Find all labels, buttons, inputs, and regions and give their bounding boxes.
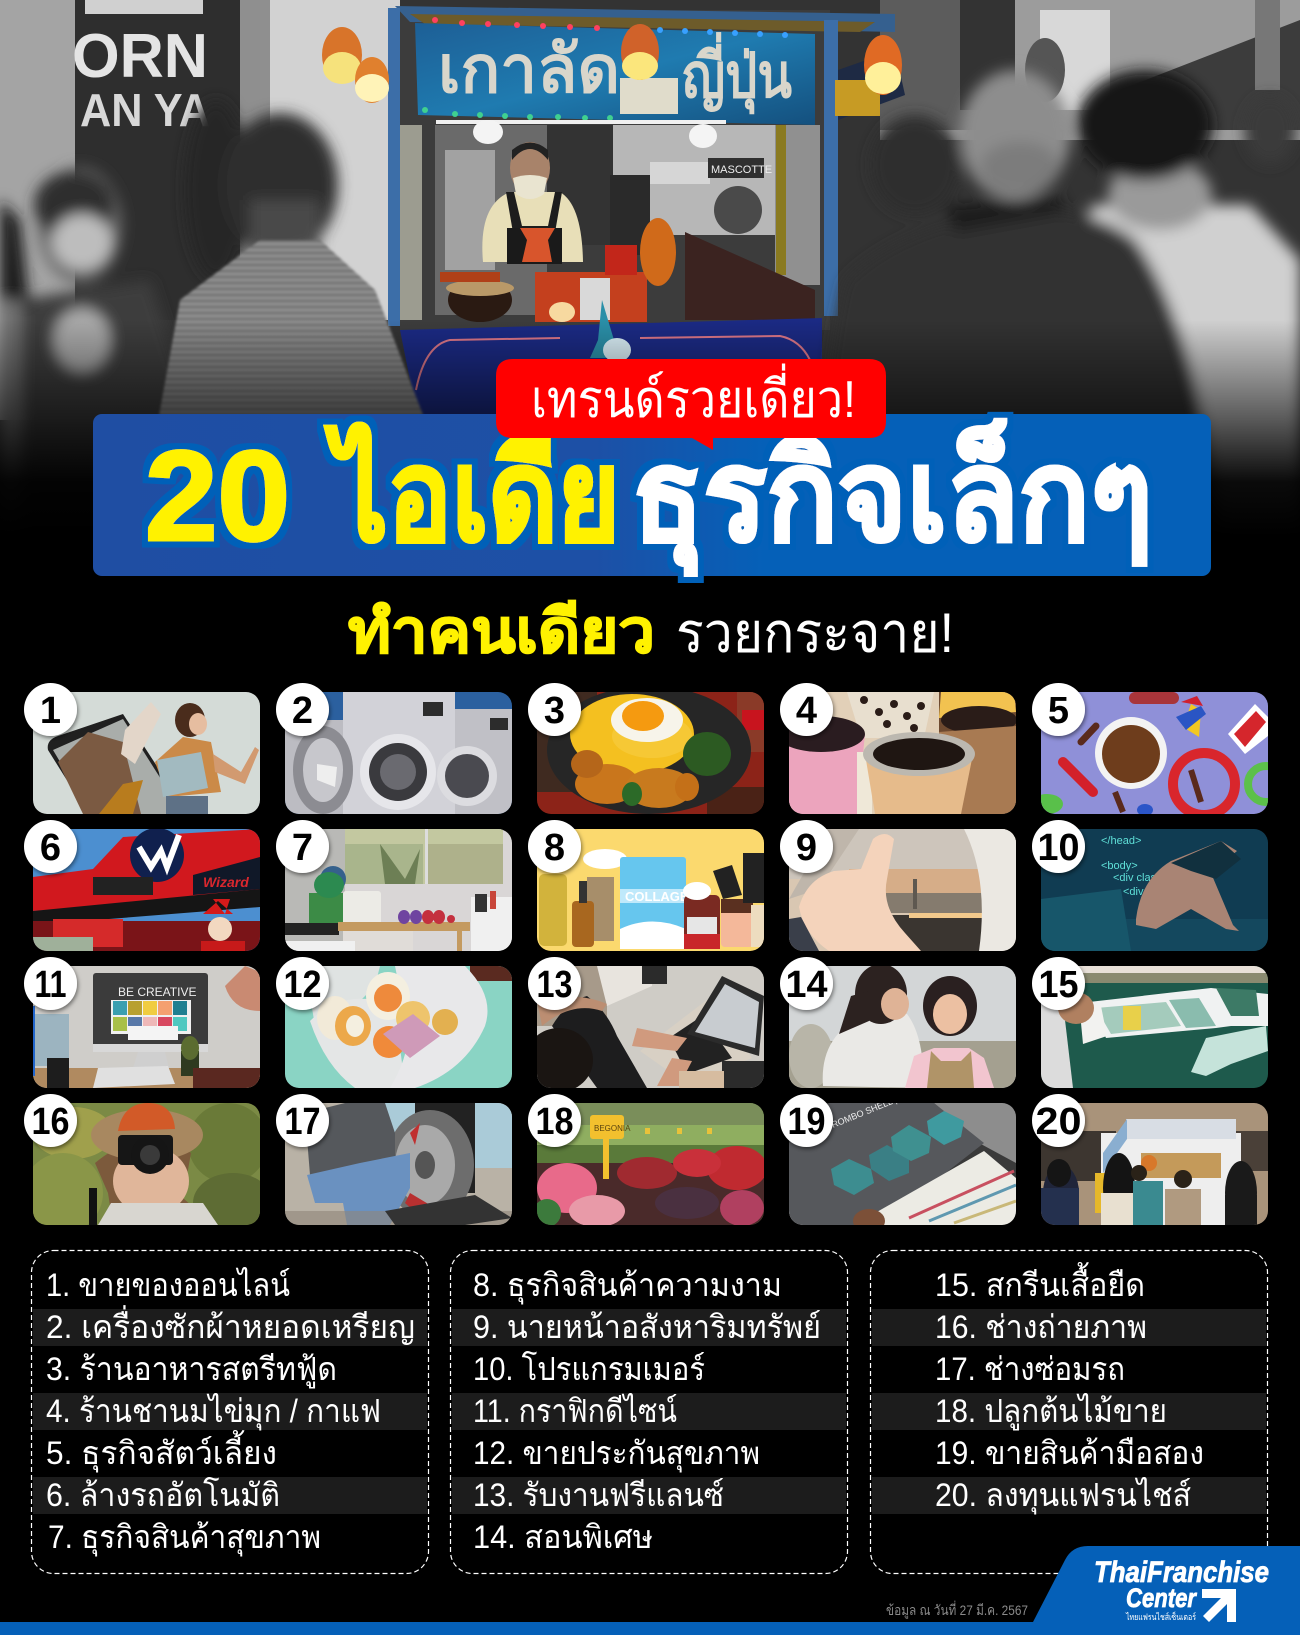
tile 1: online shopping (24, 683, 260, 814)
number badge 18 (528, 1094, 581, 1147)
list panel 3: 16. ช่างถ่ายภาพ (935, 1309, 1147, 1345)
number badge 14: 14 (786, 964, 828, 1006)
roof (395, 6, 895, 32)
food cart stall: เกาลัด (438, 32, 620, 106)
number badge 10 (1032, 820, 1085, 873)
logo: ThaiFranchise Center (1033, 1546, 1300, 1622)
side sign (838, 50, 905, 120)
tile 15: t-shirt screen printing (1032, 957, 1268, 1088)
logo: ThaiFranchise Center: Center (1126, 1583, 1197, 1613)
number badge 19 (780, 1094, 833, 1147)
photo: flowers and plant tag: BEGONIA (594, 1124, 631, 1133)
photo: flowers and plant tag (533, 1103, 767, 1227)
background street and buildings: ORN (72, 22, 208, 91)
tile 8: beauty products (528, 820, 764, 951)
list panel 1: 7. ธุรกิจสินค้าสุขภาพ (48, 1519, 321, 1557)
list panel 2: 8. ธุรกิจสินค้าความงาม (473, 1267, 782, 1305)
number badge 5: 5 (1048, 690, 1069, 732)
logo: ThaiFranchise Center: ไทยแฟรนไชส์เซ็นเตอร์ (1125, 1610, 1196, 1622)
title: yellow number: 20 (145, 425, 290, 568)
number badge 12 (276, 957, 329, 1010)
photo: bubble tea cups (777, 692, 1017, 814)
title banner (93, 414, 1211, 576)
photo: car wash building (33, 828, 260, 951)
tile 7: health products room (276, 820, 512, 951)
number badge 13 (528, 957, 581, 1010)
list panel 1: 4. ร้านชานมไข่มุก / กาแฟ (46, 1393, 381, 1431)
number badge 18: 18 (536, 1101, 574, 1143)
tile 13: freelance (525, 957, 764, 1092)
number badge 9 (780, 820, 833, 873)
number badge 4 (780, 683, 833, 736)
LEDs (432, 17, 600, 31)
photo: hand pointing at city (789, 829, 1016, 951)
number badge 16: 16 (32, 1101, 70, 1143)
photo: hand on code screen: <div class (1113, 872, 1162, 884)
food cart stall (322, 6, 905, 420)
photo: freelancer working on laptop (525, 966, 764, 1092)
number badge 2: 2 (292, 690, 313, 732)
background street and buildings (0, 0, 1300, 420)
icon: arrow (1202, 1589, 1236, 1622)
title: yellow word: ไอเดีย (324, 423, 620, 568)
photo: therapy room (285, 829, 512, 951)
number badge 6: 6 (40, 827, 61, 869)
photo: hand on code screen: </head> (1101, 835, 1141, 847)
tile 12: health insurance (276, 957, 512, 1088)
number badge 3: 3 (544, 690, 565, 732)
lamps (322, 24, 902, 148)
photo: guitar picks on a card: ROMBO SHELL | G95 mm (830, 1081, 933, 1130)
number badge 11 (24, 957, 77, 1010)
date note: ข้อมูล ณ วันที่ 27 มี.ค. 2567 (886, 1601, 1028, 1619)
tile 16: photographer (24, 1094, 260, 1225)
photo: printing on green table (1041, 966, 1268, 1088)
list panel 1: 1. ขายของออนไลน์ (46, 1267, 290, 1303)
number badge 11: 11 (34, 964, 66, 1006)
logo: ThaiFranchise Center: ThaiFranchise (1094, 1556, 1269, 1589)
number badge 4: 4 (796, 690, 817, 732)
list panel 3 (870, 1250, 1268, 1574)
number badge 3 (528, 683, 581, 736)
photo: rice with egg and chicken (537, 686, 764, 814)
hero photo: street food cart among blurred crowd (0, 0, 1300, 620)
blurred crowd left (0, 100, 338, 540)
list panel 1: 3. ร้านอาหารสตรีทฟู้ด (46, 1351, 337, 1389)
list panel 1: 5. ธุรกิจสัตว์เลี้ยง (46, 1430, 277, 1473)
number badge 12: 12 (284, 964, 322, 1006)
number badge 20: 20 (1036, 1101, 1082, 1143)
subtitle: รวยกระจาย! (676, 601, 954, 664)
list panel 2: 13. รับงานฟรีแลนซ์ (473, 1477, 724, 1513)
tile 6: car wash (24, 820, 260, 951)
photo: car wash building: Wizard (203, 874, 249, 890)
vendor (482, 142, 583, 264)
photo: mother and daughter studying (789, 964, 1016, 1088)
number badge 10: 10 (1038, 827, 1080, 869)
list panel 2: 9. นายหน้าอสังหาริมทรัพย์ (473, 1309, 821, 1345)
subtitle: ทำคนเดียว (348, 598, 655, 665)
number badge 16 (24, 1094, 77, 1147)
number badge 5 (1032, 683, 1085, 736)
photo: woman leaving phone (33, 692, 260, 814)
photo: beauty supplements (537, 829, 764, 951)
number badge 1 (24, 683, 77, 736)
number badge 8 (528, 820, 581, 873)
tile 5: pets (1031, 683, 1284, 816)
list panel 1: 6. ล้างรถอัตโนมัติ (46, 1477, 280, 1513)
red speech bubble: เทรนด์รวยเดี่ยว! (531, 363, 856, 429)
number badge 2 (276, 683, 329, 736)
list panel 1 (32, 1250, 428, 1574)
photo: mechanic fixing tire (285, 1103, 512, 1225)
tile 19: second-hand goods (780, 1094, 1016, 1225)
tile 11: graphic design (24, 957, 260, 1088)
number badge 7: 7 (292, 827, 313, 869)
tile 4: bubble tea (777, 683, 1017, 814)
number badge 6 (24, 820, 77, 873)
posts (388, 8, 400, 326)
blurred crowd right (815, 70, 1300, 560)
list panel 3: 19. ขายสินค้ามือสอง (935, 1435, 1204, 1471)
number badge 15 (1032, 957, 1085, 1010)
photo: washing machines (285, 692, 512, 814)
tile 3: street food (528, 683, 764, 814)
merchandise (440, 218, 815, 322)
list panel 3: 15. สกรีนเสื้อยืด (935, 1262, 1145, 1303)
list panel 2 (450, 1250, 848, 1574)
fade to black (0, 320, 1300, 620)
title: white part: ธุรกิจเล็กๆ (632, 418, 1153, 576)
bottom blue bar (0, 1622, 1300, 1635)
food cart stall: ญี่ปุ่น (682, 32, 792, 114)
list panel 3: 17. ช่างซ่อมรถ (935, 1351, 1125, 1387)
photo: franchise booth and visitors (1041, 1103, 1268, 1225)
photo: beauty supplements: COLLAGEN (625, 889, 698, 904)
tile 2: coin laundry (276, 683, 512, 814)
list panel 2: 14. สอนพิเศษ (473, 1519, 653, 1555)
number badge 9: 9 (796, 827, 817, 869)
photo: hand on code screen: <body> (1101, 860, 1138, 872)
list panel 2: 12. ขายประกันสุขภาพ (473, 1435, 760, 1473)
number badge 7 (276, 820, 329, 873)
subtitle (348, 598, 954, 665)
list panel 2: 10. โปรแกรมเมอร์ (473, 1351, 705, 1387)
list panel 3: 20. ลงทุนแฟรนไชส์ (935, 1477, 1191, 1515)
photo: hand on code screen: <div (1123, 886, 1144, 898)
photo: pet toys and food bowl (1041, 692, 1268, 814)
tile 18: plant nursery (528, 1094, 767, 1227)
number badge 13: 13 (536, 964, 572, 1006)
photo: desktop monitor on a desk: BE CREATIVE (118, 985, 196, 999)
blue cart base (400, 318, 822, 420)
photo: woman with camera in foliage (33, 1103, 260, 1225)
list panel 1: 2. เครื่องซักผ้าหยอดเหรียญ (46, 1305, 415, 1345)
number badge 8: 8 (544, 827, 565, 869)
tile 9: real estate broker (780, 820, 1016, 951)
photo: desktop monitor on a desk (33, 966, 260, 1088)
number badge 1: 1 (40, 690, 61, 732)
tile 17: car mechanic (276, 1094, 512, 1225)
background street and buildings: AN YA (80, 84, 210, 136)
number badge 17: 17 (284, 1101, 320, 1143)
red speech bubble (496, 359, 886, 450)
photo: guitar picks on a card (789, 1103, 1016, 1225)
tile 20: franchise expo (1032, 1094, 1268, 1225)
number badge 17 (276, 1094, 329, 1147)
food cart stall: MASCOTTE (711, 164, 772, 176)
number badge 14 (780, 957, 833, 1010)
number badge 15: 15 (1038, 964, 1078, 1006)
number badge 20 (1032, 1094, 1085, 1147)
list panel 2: 11. กราฟิกดีไซน์ (473, 1393, 677, 1429)
tile 10: programmer (1032, 820, 1268, 951)
tile 14: tutor (780, 957, 1016, 1088)
photo: gloved hands holding chocolate coins (285, 966, 512, 1088)
sign (415, 23, 815, 125)
list panel 3: 18. ปลูกต้นไม้ขาย (935, 1393, 1167, 1431)
photo: hand on code screen (1041, 829, 1268, 951)
striped shirt man (140, 240, 440, 520)
number badge 19: 19 (788, 1101, 826, 1143)
